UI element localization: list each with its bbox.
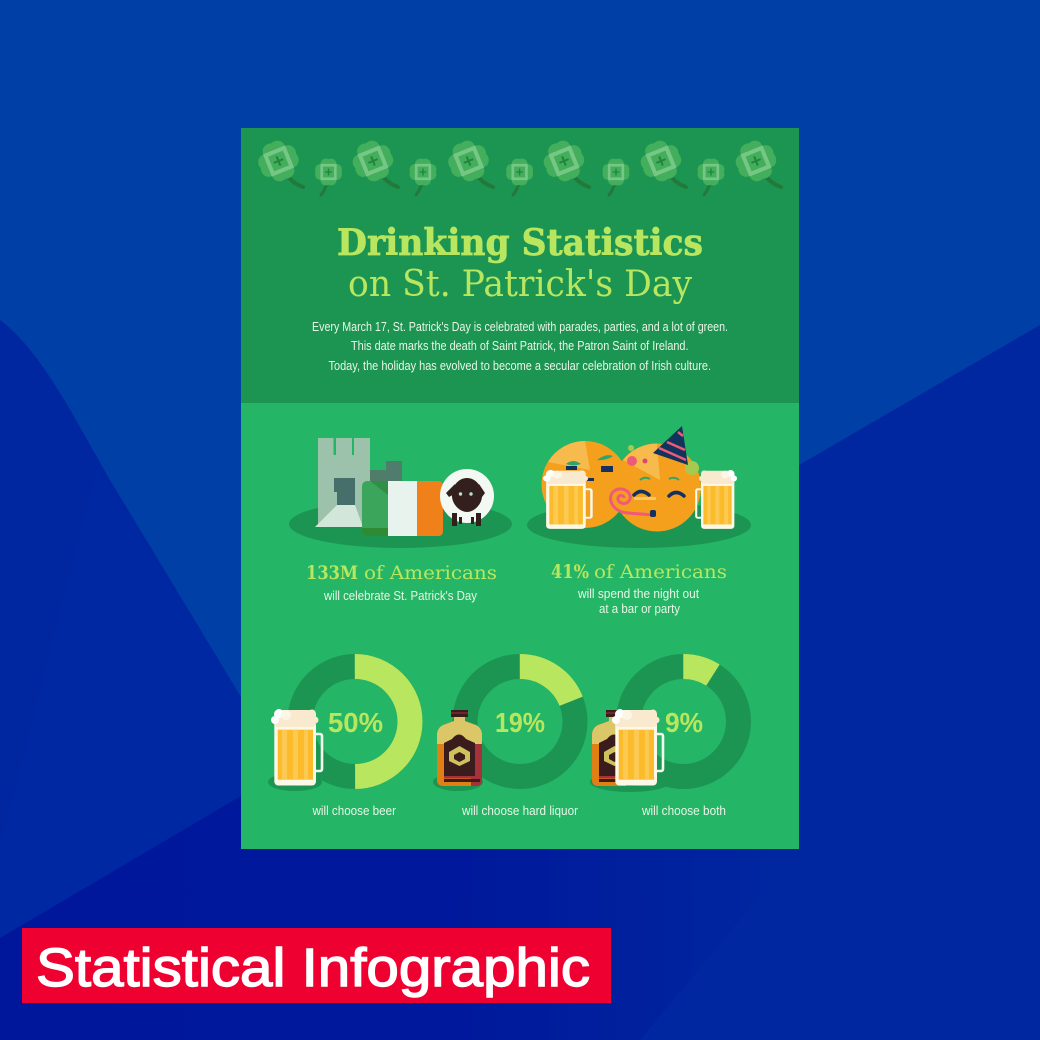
icon: left beer mug bbox=[543, 470, 591, 529]
stat: 133M of Americans: of Americans bbox=[364, 562, 497, 584]
donut chart: 19% will choose hard liquor bbox=[433, 666, 578, 818]
intro text bbox=[312, 320, 728, 373]
ground shadow bbox=[527, 502, 751, 548]
stat: 133M of Americans: will celebrate St. Patrick's Day bbox=[323, 589, 478, 603]
icon: liquor bottle bbox=[433, 710, 483, 791]
intro text: Today, the holiday has evolved to become a secular celebration of Irish culture. bbox=[328, 359, 711, 373]
icon: party hat bbox=[653, 426, 688, 465]
icon: sheep bbox=[440, 469, 494, 526]
icon: Irish flag bbox=[362, 481, 443, 536]
poster bbox=[241, 128, 799, 849]
icon: bottle and beer mug bbox=[590, 709, 670, 792]
stat: 41% of Americans: 41% bbox=[551, 561, 589, 583]
icon: beer mug bbox=[268, 709, 322, 791]
donut chart: 19% will choose hard liquor: 19% bbox=[495, 707, 545, 738]
donut chart: 9% will choose both: 9% bbox=[665, 707, 703, 738]
icon: left face bbox=[542, 441, 628, 528]
intro text: This date marks the death of Saint Patrick, the Patron Saint of Ireland. bbox=[351, 339, 688, 353]
icon: right beer mug bbox=[696, 470, 737, 529]
icon: party blower bbox=[611, 489, 656, 517]
ground shadow bbox=[289, 500, 512, 548]
title bbox=[337, 221, 703, 305]
donut chart: 9% will choose both bbox=[590, 666, 738, 818]
donut chart: 50% will choose beer: will choose beer bbox=[312, 804, 396, 818]
intro text: Every March 17, St. Patrick's Day is celebrated with parades, parties, and a lot of green. bbox=[312, 320, 728, 334]
title: Drinking Statistics bbox=[337, 221, 703, 264]
stat: 41% of Americans bbox=[551, 561, 727, 616]
donut chart: 19% will choose hard liquor: will choose hard liquor bbox=[461, 804, 578, 818]
banner: Statistical Infographic: Statistical Infographic bbox=[36, 938, 590, 998]
stat: 41% of Americans: at a bar or party bbox=[599, 602, 681, 616]
stat: 41% of Americans: will spend the night out bbox=[577, 587, 699, 601]
donut chart: 9% will choose both: will choose both bbox=[641, 804, 726, 818]
title: on St. Patrick's Day bbox=[348, 264, 693, 305]
banner: Statistical Infographic bbox=[22, 928, 611, 1003]
stat: 133M of Americans bbox=[306, 562, 497, 603]
donut chart: 50% will choose beer: 50% bbox=[328, 707, 383, 738]
icon: right face bbox=[613, 444, 701, 532]
clover border bbox=[253, 135, 782, 195]
body panel bbox=[241, 403, 799, 849]
donut chart: 50% will choose beer bbox=[268, 666, 410, 818]
illustration: castle, Irish flag and sheep bbox=[289, 438, 512, 548]
icon: castle tower bbox=[315, 438, 370, 527]
stat: 133M of Americans: 133M bbox=[306, 562, 358, 584]
header band bbox=[241, 128, 799, 403]
stat: 41% of Americans: of Americans bbox=[594, 561, 727, 583]
icon: small tower bbox=[369, 461, 402, 482]
illustration: party faces with beer mugs bbox=[527, 426, 751, 548]
